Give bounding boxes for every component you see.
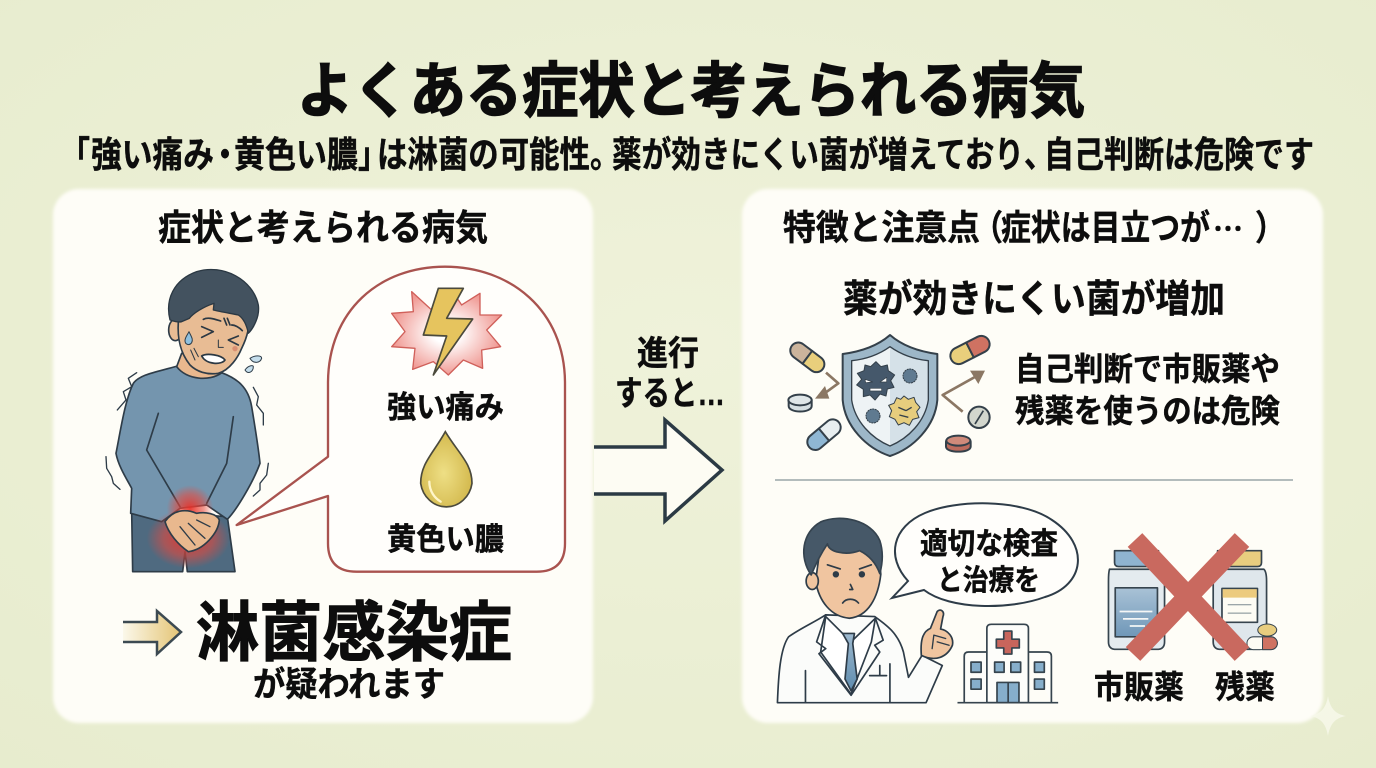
icon: red cross mark (1133, 540, 1242, 654)
subtitle (60, 134, 1314, 175)
subtitle: 。 (590, 134, 620, 175)
subtitle: 黄色い膿 (234, 134, 358, 175)
subheading: resistant bacteria increasing: 薬が効きにくい菌が増加 (843, 279, 1225, 321)
panel heading: characteristics: 特徴と注意点 (783, 209, 980, 248)
label: strong pain: 強い痛み (387, 390, 504, 425)
speech bubble: appropriate testing and treatment: 適切な検査 (920, 528, 1058, 561)
label: leftover medicine: 残薬 (1215, 669, 1275, 705)
panel heading: symptoms: 症状と考えられる病気 (158, 207, 488, 248)
subtitle: 薬が効きにくい菌が増えており (612, 134, 1024, 175)
speech bubble: appropriate testing and treatment: と治療を (937, 564, 1040, 597)
callout: symptoms bubble (237, 267, 565, 572)
icon: shield with germs and pills (787, 333, 992, 456)
subtitle: 」 (358, 134, 388, 175)
subtitle: 「 (60, 134, 90, 175)
arrow: to diagnosis (123, 611, 181, 654)
label: when it progresses: 進行 (637, 335, 699, 373)
label: yellow pus: 黄色い膿 (387, 522, 504, 557)
icon: medicine bottles crossed out (1108, 551, 1277, 650)
panel: symptoms and suspected disease (53, 189, 593, 723)
diagnosis caption: が疑われます (253, 665, 445, 704)
label: when it progresses: すると… (615, 375, 725, 413)
label: OTC medicine: 市販薬 (1094, 669, 1184, 705)
title: よくある症状と考えられる病気 (297, 58, 1085, 125)
panel: characteristics and cautions (742, 189, 1323, 723)
illustration: doctor (777, 518, 953, 703)
panel heading: characteristics (783, 205, 1285, 249)
subtitle: ・ (210, 134, 240, 175)
icon: hospital (957, 624, 1058, 703)
warning text: self-medication is dangerous: 自己判断で市販薬や (1015, 351, 1280, 387)
subtitle: 、 (1024, 134, 1054, 175)
warning text: self-medication is dangerous (1015, 351, 1280, 429)
warning text: self-medication is dangerous: 残薬を使うのは危険 (1015, 393, 1280, 429)
arrow: progression (594, 420, 722, 521)
panel heading: characteristics: … (1213, 205, 1243, 249)
speech bubble: appropriate testing and treatment (892, 503, 1078, 606)
icon: pain starburst with lightning bolt (392, 288, 502, 375)
subtitle: 自己判断は危険です (1044, 134, 1314, 175)
label: when it progresses (615, 335, 725, 413)
subtitle: は淋菌の可能性 (377, 134, 590, 175)
icon: yellow pus drop (421, 432, 472, 507)
panel heading: characteristics: ） (1255, 209, 1285, 248)
panel heading: characteristics: （ (973, 209, 1003, 248)
subtitle: 強い痛み (91, 134, 214, 175)
illustration: man in pain (106, 269, 268, 572)
diagnosis: gonorrhea: 淋菌感染症 (196, 596, 512, 669)
icon: sparkle (1310, 696, 1346, 736)
panel heading: characteristics: 症状は目立つが (1001, 209, 1210, 248)
